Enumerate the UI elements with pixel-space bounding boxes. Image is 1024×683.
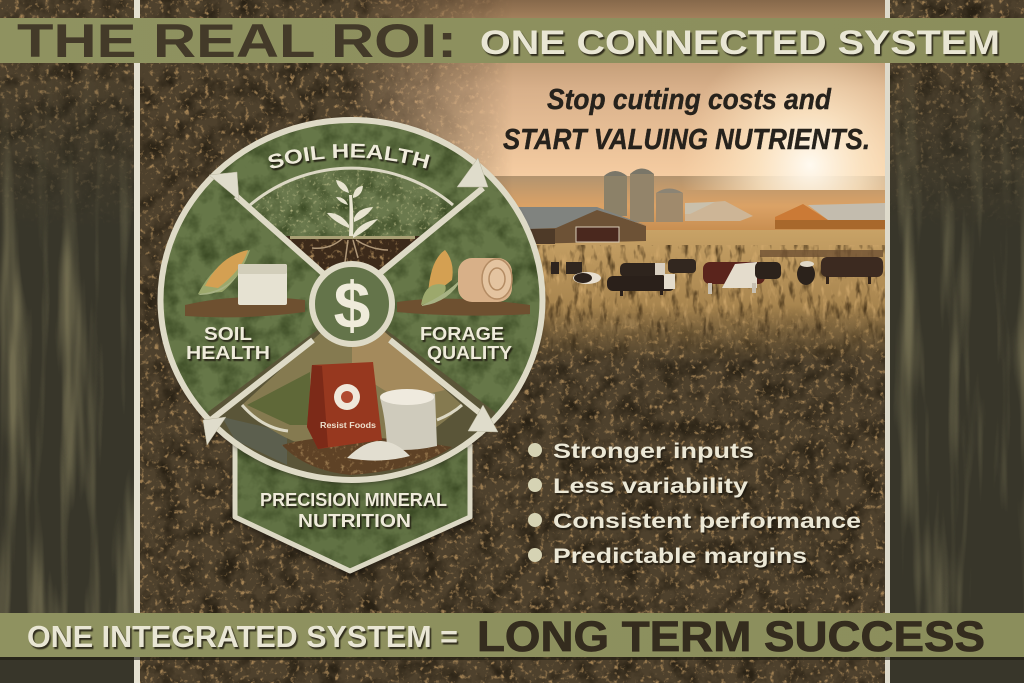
shield label: NUTRITION bbox=[298, 511, 411, 531]
shield label bbox=[260, 490, 447, 531]
footer: one integrated system: ONE INTEGRATED SYSTEM = bbox=[27, 619, 458, 654]
bullet: predictable margins: Predictable margins bbox=[553, 545, 807, 568]
bullet: stronger inputs: Stronger inputs bbox=[553, 440, 754, 463]
shield: precision mineral nutrition bbox=[235, 445, 470, 571]
distant farm buildings bbox=[685, 201, 885, 229]
headline: Stop cutting costs: Stop cutting costs and bbox=[547, 84, 832, 116]
bullet: consistent performance: Consistent performance bbox=[553, 510, 861, 533]
hub: dollar sign: $ bbox=[334, 268, 370, 342]
shield label: PRECISION MINERAL bbox=[260, 490, 447, 510]
icon: cattle herd bbox=[551, 250, 883, 296]
bullet list bbox=[528, 440, 861, 568]
gravel pile bbox=[282, 438, 452, 475]
wheel ring and spokes bbox=[160, 120, 542, 480]
right segment: corn and hay bbox=[397, 250, 530, 316]
label: forage quality: QUALITY bbox=[427, 343, 512, 363]
footer band bbox=[0, 613, 1024, 661]
label: forage quality bbox=[420, 324, 512, 363]
hub: dollar sign bbox=[312, 264, 392, 344]
bullet: less variability bbox=[528, 475, 748, 498]
title band bbox=[0, 14, 1024, 67]
bullet: stronger inputs bbox=[528, 440, 754, 463]
icon: white sack bbox=[380, 389, 437, 450]
bullet: less variability: Less variability bbox=[553, 475, 748, 498]
label: soil health left: HEALTH bbox=[186, 343, 270, 363]
panel: right column bbox=[890, 60, 1024, 683]
panel: farm sunset scene bbox=[350, 0, 885, 358]
panel: left column bbox=[0, 60, 134, 683]
grazing field bbox=[536, 230, 885, 358]
icon: sprout bbox=[312, 180, 388, 262]
arrowheads bbox=[203, 158, 498, 445]
mineral pile bbox=[347, 441, 410, 461]
label: soil health top: SOIL HEALTH bbox=[268, 144, 432, 171]
label: soil health left bbox=[186, 324, 270, 363]
title: one connected system: ONE CONNECTED SYSTEM bbox=[480, 24, 1000, 62]
icon: red feed bag: Resist Foods bbox=[320, 421, 377, 430]
title: the real roi: THE REAL ROI: bbox=[17, 14, 457, 67]
icon: main barn bbox=[513, 207, 648, 244]
footer: long term success: LONG TERM SUCCESS bbox=[477, 613, 985, 661]
icon: silos bbox=[604, 168, 683, 222]
label: forage quality: FORAGE bbox=[420, 324, 504, 344]
headline: Stop cutting costs: START VALUING NUTRIENTS. bbox=[503, 124, 870, 156]
panel border lines bbox=[134, 0, 890, 683]
top segment: plant illustration bbox=[249, 166, 454, 271]
left segment: corn and container bbox=[185, 250, 305, 317]
icon: red feed bag bbox=[307, 362, 382, 449]
bottom segment: mineral bag bbox=[241, 332, 463, 475]
headline: Stop cutting costs bbox=[503, 84, 870, 156]
label: soil health left: SOIL bbox=[204, 324, 252, 344]
wheel: connected system bbox=[158, 117, 546, 486]
